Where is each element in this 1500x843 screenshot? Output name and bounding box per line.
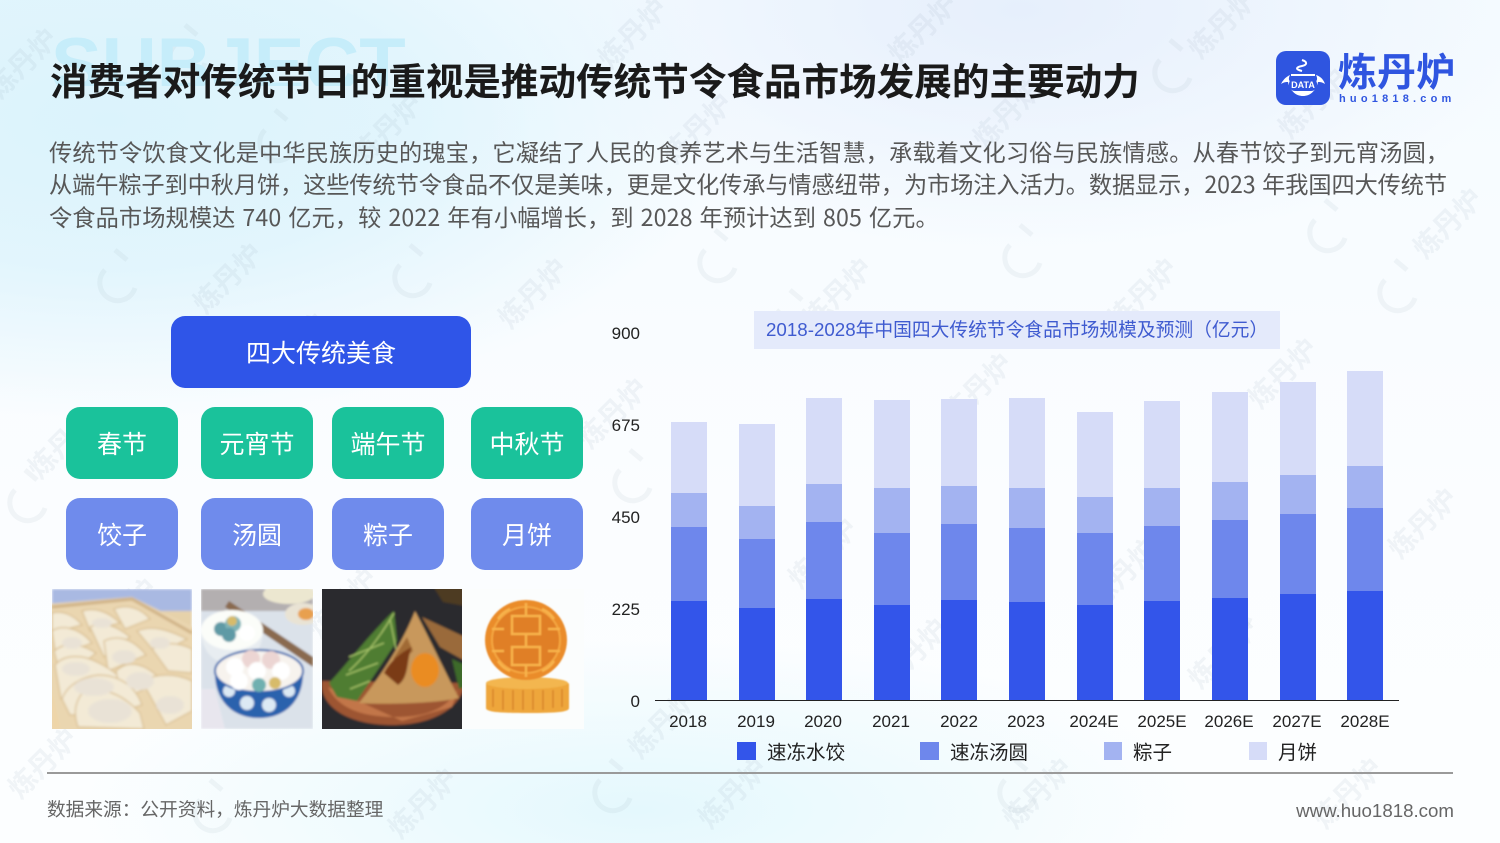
intro paragraph: 传统节令饮食文化是中华民族历史的瑰宝，它凝结了人民的食养艺术与生活智慧，承载着文化习俗与民族情感。从春节饺子到元宵汤圆， [49, 134, 1449, 168]
background watermark pattern: 炼丹炉 [1182, 613, 1264, 694]
x axis labels [669, 712, 1390, 731]
icon: cauldron DATA: DATA [1291, 80, 1315, 90]
background watermark pattern: 炼丹炉 [1307, 753, 1389, 834]
y axis labels: 900 [612, 324, 640, 343]
festival: 端午节 [332, 407, 444, 479]
footer divider [47, 772, 1453, 774]
bar 2020 [806, 398, 842, 700]
title: 消费者对传统节日的重视是推动传统节令食品市场发展的主要动力 [50, 51, 1140, 106]
food: 汤圆: 汤圆 [232, 516, 282, 552]
y axis labels [612, 324, 640, 711]
background watermark pattern: 炼丹炉 [622, 683, 704, 764]
legend: 速冻水饺 [767, 742, 845, 764]
background watermark pattern: 炼丹炉 [1242, 333, 1324, 414]
background watermark pattern: 炼丹炉 [382, 763, 464, 843]
legend: 速冻汤圆 [950, 742, 1028, 764]
x axis labels: 2020 [804, 712, 842, 731]
background watermark pattern: 炼丹炉 [347, 88, 429, 169]
stacked bar chart [612, 324, 1399, 764]
food: 粽子: 粽子 [363, 516, 413, 552]
food: 饺子 [66, 498, 178, 570]
background watermark pattern: 炼丹炉 [22, 403, 104, 484]
festival: 中秋节: 中秋节 [489, 425, 564, 461]
x axis labels: 2027E [1272, 712, 1322, 731]
y axis labels: 675 [612, 416, 640, 435]
festival: 中秋节 [471, 407, 583, 479]
food: 月饼 [471, 498, 583, 570]
image: zongzi [322, 589, 462, 729]
bar 2026E [1212, 392, 1248, 700]
image: tangyuan [201, 589, 313, 729]
background watermark pattern: 炼丹炉 [782, 513, 864, 594]
food: 汤圆 [201, 498, 313, 570]
bar 2021 [874, 400, 910, 700]
background watermark pattern: 炼丹炉 [82, 573, 164, 654]
legend [737, 742, 1317, 764]
festival: 元宵节: 元宵节 [219, 425, 294, 461]
background watermark pattern: 炼丹炉 [967, 73, 1049, 154]
intro paragraph: 从端午粽子到中秋月饼，这些传统节令食品不仅是美味，更是文化传承与情感纽带，为市场注入活力。数据显示，2023 年我国四大传统节 [49, 166, 1447, 200]
background watermark pattern: 炼丹炉 [1407, 183, 1489, 264]
x axis labels: 2026E [1204, 712, 1254, 731]
background watermark pattern: 炼丹炉 [997, 753, 1079, 834]
bar 2025E [1144, 401, 1180, 700]
x axis labels: 2028E [1340, 712, 1390, 731]
brand name: 炼丹炉 [1338, 42, 1455, 98]
background watermark pattern: 炼丹炉 [797, 253, 879, 334]
bar 2028E [1347, 371, 1383, 700]
bar 2023 [1009, 398, 1045, 700]
food: 月饼: 月饼 [502, 516, 552, 552]
x axis labels: 2023 [1007, 712, 1045, 731]
website url: www.huo1818.com [1296, 800, 1454, 821]
icon: cauldron DATA [1276, 51, 1330, 105]
intro paragraph: 令食品市场规模达 740 亿元，较 2022 年有小幅增长，到 2028 年预计达到 805 亿元。 [49, 199, 939, 233]
background watermark pattern: 炼丹炉 [2, 723, 84, 804]
x axis labels: 2018 [669, 712, 707, 731]
food: 粽子 [332, 498, 444, 570]
x axis labels: 2022 [940, 712, 978, 731]
festival: 元宵节 [201, 407, 313, 479]
background watermark pattern: 炼丹炉 [302, 563, 384, 644]
festival: 春节: 春节 [97, 425, 147, 461]
background watermark pattern: 炼丹炉 [1082, 533, 1164, 614]
background watermark pattern: 炼丹炉 [937, 348, 1019, 429]
y axis labels: 225 [612, 600, 640, 619]
background watermark pattern: 炼丹炉 [572, 373, 654, 454]
intro paragraph [49, 134, 1449, 233]
brand url: huo1818.com [1339, 93, 1456, 105]
background watermark pattern: 炼丹炉 [872, 613, 954, 694]
festival: 端午节: 端午节 [350, 425, 426, 461]
chart title: 2018-2028年中国四大传统节令食品市场规模及预测（亿元） [766, 319, 1268, 340]
data source: 数据来源：公开资料，炼丹炉大数据整理 [47, 799, 383, 820]
background watermark pattern: 炼丹炉 [692, 753, 774, 834]
bar 2024E [1077, 412, 1113, 700]
background watermark pattern: 炼丹炉 [252, 308, 334, 389]
image: mooncake [462, 598, 584, 729]
background watermark pattern: 炼丹炉 [1272, 63, 1354, 144]
chart title [754, 311, 1280, 349]
food: 饺子: 饺子 [97, 516, 147, 552]
y axis labels: 0 [631, 692, 640, 711]
image: dumplings [52, 589, 192, 729]
background watermark pattern: 炼丹炉 [1382, 483, 1464, 564]
legend: 粽子 [1133, 742, 1172, 764]
x axis labels: 2021 [872, 712, 910, 731]
heading box [171, 316, 471, 388]
bar 2019 [739, 424, 775, 700]
background watermark pattern: 炼丹炉 [1102, 253, 1184, 334]
x axis labels: 2025E [1137, 712, 1187, 731]
y axis labels: 450 [612, 508, 640, 527]
background watermark pattern: 炼丹炉 [187, 238, 269, 319]
logo: 炼丹炉 huo1818.com [1276, 42, 1456, 105]
heading box: 四大传统美食 [246, 334, 396, 370]
x axis line [655, 700, 1399, 702]
bar 2027E [1280, 382, 1316, 700]
legend: 月饼 [1278, 742, 1317, 764]
festival: 春节 [66, 407, 178, 479]
bar 2022 [941, 399, 977, 700]
x axis labels: 2024E [1069, 712, 1119, 731]
bar 2018 [671, 422, 707, 700]
background watermark pattern: 炼丹炉 [657, 88, 739, 169]
x axis labels: 2019 [737, 712, 775, 731]
background watermark pattern: 炼丹炉 [492, 253, 574, 334]
